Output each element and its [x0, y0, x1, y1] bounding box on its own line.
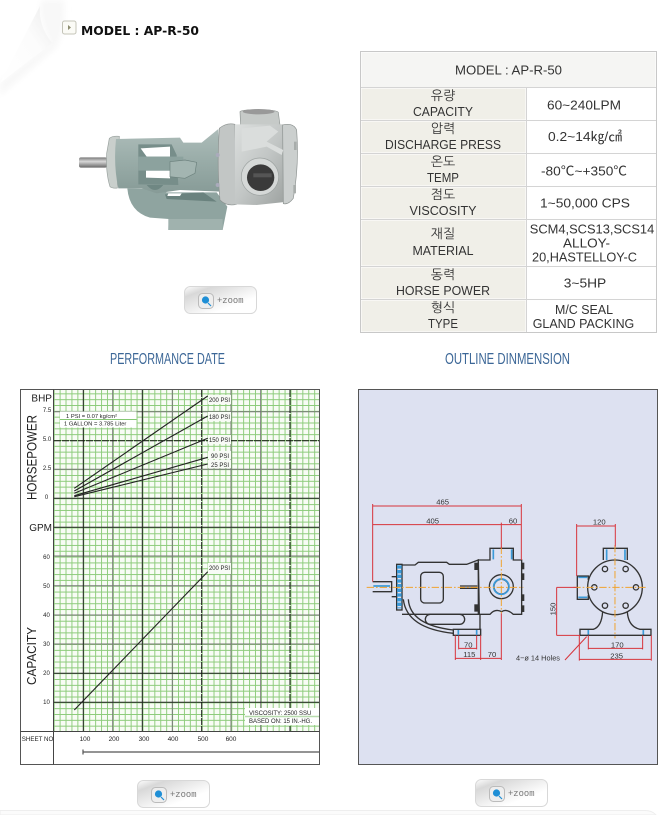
- curve labels: 200 PSI: [209, 397, 230, 404]
- note: unit conversion: 1 PSI = 0.07 kg/cm²: [66, 414, 117, 420]
- axis labels: HORSEPOWER: [24, 415, 40, 500]
- front view: [577, 548, 651, 635]
- row: type: M/C SEAL: [555, 302, 613, 317]
- row: viscosity: VISCOSITY: [410, 203, 477, 218]
- heading: model: MODEL : AP-R-50: [81, 23, 199, 38]
- axis ticks: x: 100: [80, 736, 91, 743]
- table header: model: MODEL : AP-R-50: [455, 62, 562, 78]
- axis ticks: x: 300: [139, 736, 150, 743]
- dimension values: 235: [610, 651, 623, 660]
- axis labels: CAPACITY: [24, 627, 39, 685]
- axis ticks: y: 60: [43, 555, 50, 561]
- row: capacity: [362, 88, 621, 120]
- row: discharge press: [362, 122, 622, 152]
- product photo: pump: [79, 109, 297, 230]
- row: type: GLAND PACKING: [533, 316, 634, 331]
- row: viscosity: [362, 188, 630, 218]
- axis ticks: y: 2.5: [43, 466, 52, 472]
- axis ticks: y: 20: [43, 671, 50, 677]
- dimension values: 465: [436, 497, 449, 506]
- row: capacity: CAPACITY: [413, 104, 473, 119]
- dimension values: 4−ø 14 Holes: [516, 653, 560, 662]
- row: material: [362, 220, 654, 266]
- axis ticks: x: 400: [168, 736, 179, 743]
- dimension values: 120: [593, 517, 606, 526]
- curve labels: 90 PSI: [211, 453, 229, 460]
- axis ticks: y: 30: [43, 642, 50, 648]
- curve labels: 150 PSI: [209, 437, 230, 444]
- section heading: outline: OUTLINE DINMENSION: [445, 351, 570, 368]
- section heading: performance: PERFORMANCE DATE: [110, 351, 225, 368]
- row: viscosity: 1~50,000 CPS: [540, 196, 630, 210]
- row: capacity: 유량: [431, 89, 455, 102]
- row: material: 재질: [431, 227, 455, 240]
- axis labels: [24, 394, 52, 685]
- note: viscosity basis: VISCOSITY: 2500 SSU: [249, 711, 311, 717]
- dimension values: 170: [611, 640, 624, 649]
- row: type: 형식: [431, 301, 455, 314]
- centre lines: [367, 545, 647, 638]
- icon: heading arrow box: [62, 21, 76, 34]
- dimension values: 115: [463, 650, 475, 659]
- dimension values: 70: [488, 650, 496, 659]
- zoom button: chart: +zoom: [170, 790, 196, 800]
- dimension lines: [373, 504, 651, 661]
- axis ticks: y: 50: [43, 584, 50, 590]
- note: unit conversion: [60, 412, 136, 428]
- table header: model: [362, 52, 656, 87]
- dimension values: 405: [426, 516, 439, 525]
- row: temp: TEMP: [427, 170, 459, 185]
- axis labels: BHP: [31, 394, 52, 404]
- row: material: SCM4,SCS13,SCS14: [530, 222, 654, 236]
- footer panel edge: [0, 810, 656, 815]
- note: viscosity basis: [245, 708, 319, 725]
- axis ticks: y: 10: [43, 700, 50, 706]
- axis ticks: y: [43, 408, 52, 706]
- row: temp: [362, 154, 627, 186]
- row: material: 20,HASTELLOY-C: [532, 250, 637, 264]
- dimension values: 70: [464, 640, 473, 649]
- axis ticks: x: 600: [226, 736, 237, 743]
- row: material: MATERIAL: [412, 243, 474, 258]
- row: viscosity: 점도: [431, 188, 455, 201]
- row: type: [362, 300, 634, 332]
- curve labels: 180 PSI: [209, 414, 230, 421]
- note: unit conversion: 1 GALLON = 3.785 Liter: [64, 422, 126, 428]
- axis ticks: y: 5.0: [43, 437, 52, 443]
- axis ticks: x: 200: [109, 736, 120, 743]
- row: material: ALLOY-: [563, 236, 610, 250]
- row: discharge press: 압력: [431, 122, 455, 135]
- row: horse power: 동력: [431, 268, 455, 281]
- dimension values: 150: [548, 603, 557, 615]
- zoom button: product photo: +zoom: [217, 296, 244, 306]
- row: type: TYPE: [428, 316, 458, 331]
- axis labels: GPM: [29, 523, 52, 534]
- row: capacity: 60~240LPM: [547, 98, 621, 112]
- spec table: [360, 52, 656, 332]
- row: horse power: [362, 268, 606, 298]
- chart: performance graph: [20, 390, 320, 764]
- axis ticks: y: 7.5: [43, 408, 52, 414]
- axis ticks: x: [22, 736, 237, 743]
- row: horse power: 3~5HP: [564, 276, 606, 290]
- curve labels: [208, 395, 231, 574]
- row: discharge press: DISCHARGE PRESS: [385, 137, 501, 152]
- zoom button: drawing: +zoom: [508, 789, 534, 799]
- axis ticks: y: 40: [43, 613, 50, 619]
- horsepower curves: [74, 396, 208, 497]
- speed range bar: [83, 750, 319, 754]
- note: viscosity basis: BASED ON: 15 IN.-HG.: [249, 719, 312, 725]
- page curl decoration: [0, 0, 64, 96]
- curve labels: 25 PSI: [211, 462, 229, 469]
- row: temp: -80℃~+350℃: [541, 164, 627, 178]
- drawing: outline dimensions: [358, 390, 658, 764]
- side view: [373, 548, 524, 635]
- dimension values: 60: [509, 516, 517, 525]
- zoom button: product photo: [184, 286, 256, 314]
- curve labels: 200 PSI: [209, 565, 230, 572]
- zoom button: chart: [138, 780, 210, 808]
- axis ticks: x: SHEET NO: [22, 736, 53, 743]
- zoom button: drawing: [476, 780, 548, 806]
- row: temp: 온도: [431, 155, 455, 168]
- row: horse power: HORSE POWER: [396, 283, 490, 298]
- capacity curve: [74, 572, 208, 710]
- row: discharge press: 0.2~14㎏/㎠: [548, 129, 622, 145]
- axis ticks: y: 0: [45, 495, 49, 501]
- blue accents: [373, 549, 643, 635]
- axis ticks: x: 500: [198, 736, 209, 743]
- dimension values: [426, 497, 624, 662]
